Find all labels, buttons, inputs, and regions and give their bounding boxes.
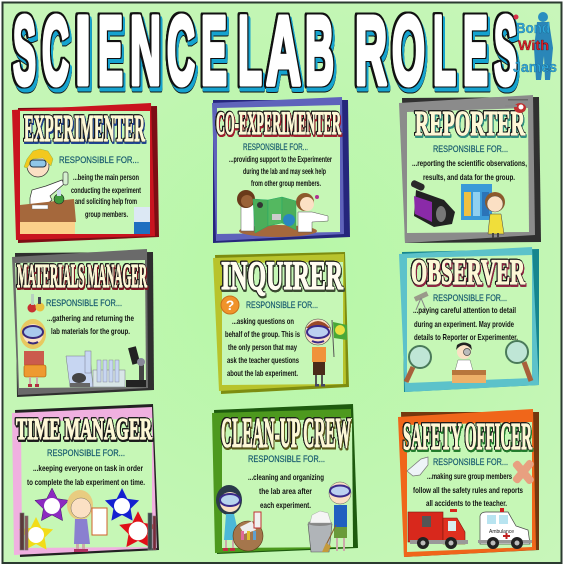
text: experimenter: and soliciting help from — [75, 196, 137, 206]
panel: time manager — [12, 404, 159, 557]
text: safety officer: all accidents to the teacher. — [426, 498, 507, 508]
text: observer: details to Reporter or Experimenter. — [414, 332, 518, 342]
icon: purple star clock — [35, 488, 69, 521]
text: inquirer: behalf of the group. This is — [225, 329, 300, 339]
text: experimenter: conducting the experiment — [71, 185, 141, 195]
text: inquirer — [225, 300, 318, 378]
text: inquirer: the only person that may — [228, 342, 297, 352]
icon: reporter girl — [485, 192, 505, 238]
text: clean-up crew: each experiment. — [260, 500, 311, 510]
icon: flasks — [28, 294, 44, 312]
icon: girl with basket — [20, 319, 46, 387]
text: observer: RESPONSIBLE FOR... — [433, 293, 507, 304]
text: clean-up crew: the lab area after — [259, 486, 313, 496]
logo: Bond With James — [513, 12, 557, 80]
text: reporter: ...reporting the scientific observations, — [412, 158, 527, 168]
text: observer: during an experiment. May provide — [414, 319, 514, 329]
text: experimenter: RESPONSIBLE FOR... — [59, 155, 139, 166]
text: safety officer: follow all the safety rules and reports — [413, 485, 523, 495]
icon: scientist at desk — [20, 149, 150, 234]
text: reporter: RESPONSIBLE FOR... — [433, 144, 508, 155]
panel: co-experimenter — [212, 97, 350, 243]
icon: magnifying glass right — [506, 341, 531, 381]
icon: telescope — [414, 291, 429, 310]
text: materials manager — [46, 298, 134, 336]
text: inquirer: ask the teacher questions — [227, 355, 299, 365]
icon: red star clock — [119, 511, 157, 547]
text: inquirer: about the lab experiment. — [227, 368, 298, 378]
panel: experimenter — [12, 103, 159, 243]
text: experimenter: group members. — [85, 209, 128, 219]
icon: girl with basket — [216, 485, 263, 551]
icon: question mark — [221, 296, 239, 314]
text: clean-up crew: RESPONSIBLE FOR... — [248, 454, 325, 465]
text: clean-up crew — [248, 454, 325, 510]
icon: observing scientist — [452, 342, 486, 383]
icon: yellow star clock — [19, 517, 53, 550]
text: reporter — [412, 144, 527, 182]
text: safety officer: RESPONSIBLE FOR... — [433, 457, 508, 468]
text: materials manager: ...gathering and returning the — [47, 313, 134, 323]
text: time manager: ...keeping everyone on task in order — [33, 463, 144, 473]
text: CO-EXPERIMENTER — [216, 106, 341, 142]
icon: magnifying glass left — [406, 346, 431, 382]
text: safety officer — [413, 457, 523, 508]
text: co-experimenter: RESPONSIBLE FOR... — [243, 142, 308, 153]
icon: students with project board — [237, 190, 328, 237]
icon: ambulance — [478, 508, 532, 549]
heading: inquirer: INQUIRER — [221, 253, 344, 298]
text: observer: ...paying careful attention to detail — [413, 305, 516, 315]
text: co-experimenter: from other group members. — [251, 178, 321, 188]
icon: safety goggles — [407, 457, 428, 476]
text: EXPERIMENTER — [24, 108, 145, 150]
text: co-experimenter: during the lab and may seek help — [243, 166, 326, 176]
icon: weather board — [461, 184, 492, 220]
icon: video camera — [410, 179, 455, 227]
panel: materials manager — [12, 249, 154, 397]
icon: lab equipment — [66, 346, 146, 387]
panel: reporter — [399, 95, 541, 243]
text: safety officer: ...making sure group members — [427, 471, 512, 481]
text: experimenter: ...being the main person — [73, 172, 139, 182]
panel: inquirer — [213, 252, 349, 394]
logo: Bond With James: James — [513, 59, 557, 76]
text: inquirer: ...asking questions on — [232, 316, 294, 326]
panel: observer — [399, 247, 539, 392]
text: reporter: results, and data for the group. — [423, 172, 515, 182]
text: materials manager: lab materials for the group. — [51, 326, 130, 336]
logo: Bond With James: With — [518, 37, 549, 53]
icon: blue star clock — [105, 488, 139, 521]
icon: boy with flag — [305, 319, 347, 386]
text: time manager: to complete the lab experiment on time. — [27, 477, 145, 487]
logo: Bond With James: Bond — [516, 20, 550, 37]
panel: clean-up crew — [212, 404, 358, 554]
text: clean-up crew: ...cleaning and organizing — [248, 472, 324, 482]
text: observer — [413, 293, 518, 342]
icon: bandage cross — [512, 459, 535, 485]
icon: boy with trash can — [308, 482, 351, 552]
text: materials manager: RESPONSIBLE FOR... — [46, 298, 122, 309]
icon: test tubes — [20, 513, 156, 550]
text: time manager — [27, 448, 145, 487]
text: MATERIALS MANAGER — [17, 258, 147, 295]
text: co-experimenter — [229, 142, 332, 188]
text: time manager: RESPONSIBLE FOR... — [47, 448, 125, 459]
text: co-experimenter: ...providing support to the Experimenter — [229, 154, 332, 164]
icon: ambulance: Ambulance — [489, 529, 514, 535]
title — [13, 0, 517, 105]
icon: fire truck — [408, 509, 468, 549]
icon: girl with chart — [67, 490, 107, 552]
text: experimenter — [59, 155, 141, 219]
text: inquirer: RESPONSIBLE FOR... — [246, 300, 318, 311]
heading: time manager: TIME MANAGER — [16, 411, 152, 446]
panel: safety officer — [398, 409, 539, 557]
icon: helicopter — [505, 99, 528, 113]
icon: question mark: ? — [226, 297, 234, 313]
